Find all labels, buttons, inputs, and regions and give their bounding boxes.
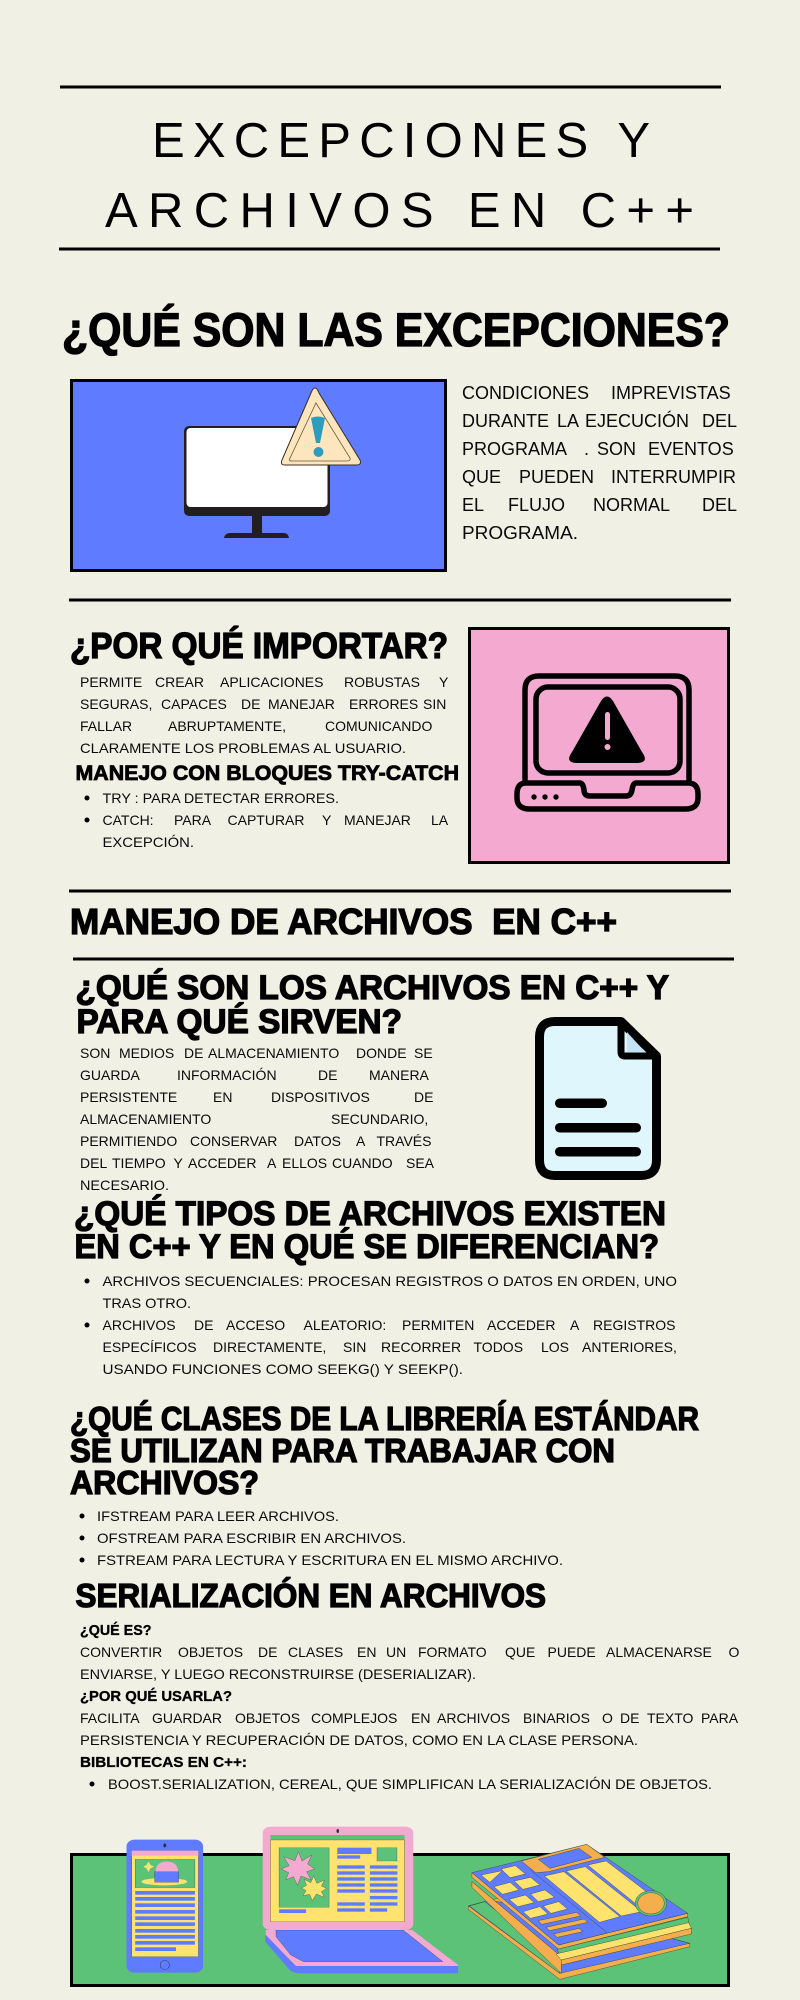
text: qué son los archivos: MEDIOS	[119, 1045, 174, 1061]
text: serialización: PUEDE	[548, 1644, 596, 1660]
text: qué son los archivos: DISPOSITIVOS	[271, 1089, 370, 1105]
text: qué son los archivos: DEL	[80, 1155, 107, 1171]
heading: tipos de archivos: ¿QUÉ TIPOS DE ARCHIVOS EXISTEN	[74, 1193, 666, 1233]
icon: laptop	[263, 1827, 458, 1973]
text: serialización: FACILITA	[80, 1710, 140, 1726]
text: qué son los archivos: DE	[184, 1045, 203, 1061]
text: serialización: FORMATO	[418, 1644, 487, 1660]
list: tipos de archivos: ACCEDER	[487, 1317, 555, 1333]
heading: qué son los archivos: PARA QUÉ SIRVEN?	[76, 1001, 402, 1041]
text: qué son los archivos: DE	[318, 1067, 337, 1083]
text: qué son los archivos: DATOS	[294, 1133, 341, 1149]
text: por qué importar: APLICACIONES	[220, 674, 323, 690]
text: qué son los archivos: INFORMACIÓN	[177, 1067, 277, 1083]
text: definición de excepciones: FLUJO	[508, 495, 565, 515]
icon: warning triangle	[281, 388, 360, 465]
text: serialización: ¿POR QUÉ USARLA?	[80, 1688, 232, 1705]
list: try catch: CAPTURAR	[228, 812, 305, 828]
text: serialización	[80, 1622, 740, 1792]
list: tipos de archivos: TODOS	[474, 1339, 523, 1355]
list: try catch	[84, 790, 449, 850]
text: serialización: ARCHIVOS	[437, 1710, 510, 1726]
text: definición de excepciones: PUEDEN	[519, 467, 594, 487]
list: try catch: TRY : PARA DETECTAR ERRORES.	[102, 790, 339, 806]
list: tipos de archivos: ESPECÍFICOS	[102, 1339, 197, 1355]
heading: clases de la librería: ¿QUÉ CLASES DE LA LIBRERÍA ESTÁNDAR	[70, 1400, 699, 1437]
list: tipos de archivos: ARCHIVOS SECUENCIALES: PROCESAN REGISTROS O DATOS EN ORDEN, UNO	[102, 1273, 677, 1289]
text: qué son los archivos: GUARDA	[80, 1067, 141, 1083]
icon: document	[540, 1022, 656, 1176]
text: qué son los archivos: SE	[414, 1045, 433, 1061]
list: try catch: MANEJAR	[344, 812, 411, 828]
text: qué son los archivos: DE	[414, 1089, 433, 1105]
text: qué son los archivos: PERMITIENDO	[80, 1133, 177, 1149]
icon: phone	[127, 1840, 203, 1973]
text: por qué importar: SEGURAS,	[80, 696, 152, 712]
icon: monitor	[184, 426, 330, 538]
text: definición de excepciones: INTERRUMPIR	[611, 467, 736, 487]
text: qué son los archivos: PERSISTENTE	[80, 1089, 177, 1105]
text: definición de excepciones: EL	[462, 495, 484, 515]
text: serialización: QUE	[505, 1644, 535, 1660]
text: serialización: ALMACENARSE	[606, 1644, 712, 1660]
list: clases: OFSTREAM PARA ESCRIBIR EN ARCHIVOS.	[97, 1530, 406, 1546]
list: clases	[80, 1508, 563, 1568]
text: qué son los archivos: DONDE	[356, 1045, 407, 1061]
text: definición de excepciones: LA	[557, 411, 579, 431]
text: serialización: OBJETOS	[235, 1710, 300, 1726]
text: definición de excepciones: EVENTOS	[648, 439, 734, 459]
text: serialización: ENVIARSE, Y LUEGO RECONSTRUIRSE (DESERIALIZAR).	[80, 1666, 476, 1682]
text: por qué importar: Y	[439, 674, 449, 690]
text: por qué importar: MANEJAR	[268, 696, 335, 712]
text: definición de excepciones: DEL	[702, 495, 737, 515]
list: tipos de archivos: SIN	[343, 1339, 366, 1355]
title: ARCHIVOS EN C++	[105, 184, 694, 238]
text: definición de excepciones: IMPREVISTAS	[611, 383, 731, 403]
text: por qué importar	[80, 674, 449, 756]
text: qué son los archivos: TIEMPO	[112, 1155, 166, 1171]
text: por qué importar: FALLAR	[80, 718, 132, 734]
title	[105, 114, 694, 238]
title: EXCEPCIONES Y	[152, 114, 650, 168]
list: tipos de archivos: TRAS OTRO.	[102, 1295, 191, 1311]
text: por qué importar: DE	[241, 696, 260, 712]
text: definición de excepciones	[462, 383, 737, 543]
list: clases: FSTREAM PARA LECTURA Y ESCRITURA EN EL MISMO ARCHIVO.	[97, 1552, 563, 1568]
text: qué son los archivos: CONSERVAR	[190, 1133, 277, 1149]
panel: laptop warning	[470, 628, 728, 862]
list: tipos de archivos: A	[570, 1317, 580, 1333]
text: qué son los archivos	[80, 1045, 435, 1193]
heading: qué son las excepciones: ¿QUÉ SON LAS EXCEPCIONES?	[62, 303, 730, 356]
text: serialización: O	[728, 1644, 740, 1660]
text: por qué importar: COMUNICANDO	[325, 718, 432, 734]
text: definición de excepciones: QUE	[462, 467, 501, 487]
list: tipos de archivos: DIRECTAMENTE,	[213, 1339, 326, 1355]
heading: clases de la librería	[70, 1400, 699, 1501]
text: qué son los archivos: EN	[213, 1089, 232, 1105]
list: tipos de archivos	[84, 1273, 677, 1377]
text: serialización: ¿QUÉ ES?	[80, 1622, 152, 1639]
panel: monitor illustration	[72, 380, 446, 570]
text: qué son los archivos: SEA	[406, 1155, 435, 1171]
text: serialización: GUARDAR	[152, 1710, 222, 1726]
text: qué son los archivos: ACCEDER	[188, 1155, 256, 1171]
text: qué son los archivos: CUANDO	[332, 1155, 393, 1171]
text: serialización: BOOST.SERIALIZATION, CEREAL, QUE SIMPLIFICAN LA SERIALIZACIÓN DE OBJETOS.	[108, 1776, 712, 1792]
text: qué son los archivos: SECUNDARIO,	[331, 1111, 428, 1127]
text: por qué importar: ROBUSTAS	[344, 674, 420, 690]
heading: qué son los archivos: ¿QUÉ SON LOS ARCHIVOS EN C++ Y	[76, 967, 669, 1007]
heading: tipos de archivos: EN C++ Y EN QUÉ SE DIFERENCIAN?	[74, 1226, 659, 1266]
list: try catch: CATCH:	[102, 812, 154, 828]
heading: serialización: SERIALIZACIÓN EN ARCHIVOS	[76, 1577, 546, 1614]
panel: devices illustration	[72, 1827, 728, 1986]
list: tipos de archivos: ALEATORIO:	[304, 1317, 386, 1333]
list: tipos de archivos: LOS	[541, 1339, 569, 1355]
text: serialización: DE	[620, 1710, 639, 1726]
text: serialización: OBJETOS	[178, 1644, 243, 1660]
text: por qué importar: SIN	[423, 696, 446, 712]
text: serialización: EN	[411, 1710, 430, 1726]
text: por qué importar: ERRORES	[349, 696, 418, 712]
list: try catch: LA	[431, 812, 449, 828]
text: qué son los archivos: ALMACENAMIENTO	[208, 1045, 339, 1061]
list: tipos de archivos: REGISTROS	[593, 1317, 675, 1333]
text: por qué importar: PERMITE	[80, 674, 142, 690]
list: tipos de archivos: ACCESO	[226, 1317, 285, 1333]
text: definición de excepciones: SON	[597, 439, 636, 459]
heading: manejo con bloques try-catch: MANEJO CON BLOQUES TRY-CATCH	[76, 762, 459, 785]
text: qué son los archivos: Y	[174, 1155, 184, 1171]
text: definición de excepciones: EJECUCIÓN	[585, 410, 689, 431]
heading: clases de la librería: SE UTILIZAN PARA TRABAJAR CON	[70, 1432, 615, 1469]
text: definición de excepciones: PROGRAMA	[462, 439, 567, 459]
text: definición de excepciones: NORMAL	[593, 495, 670, 515]
list: tipos de archivos: USANDO FUNCIONES COMO SEEKG() Y SEEKP().	[102, 1361, 463, 1377]
text: por qué importar: ABRUPTAMENTE,	[168, 718, 286, 734]
text: por qué importar: CREAR	[155, 674, 204, 690]
heading: tipos de archivos	[74, 1193, 666, 1266]
list: tipos de archivos: ANTERIORES,	[582, 1339, 677, 1355]
list: tipos de archivos: DE	[194, 1317, 213, 1333]
text: serialización: O	[602, 1710, 613, 1726]
list: try catch: Y	[322, 812, 332, 828]
text: serialización: CLASES	[288, 1644, 343, 1660]
list: tipos de archivos: ARCHIVOS	[102, 1317, 176, 1333]
icon: laptop with warning	[517, 676, 698, 809]
text: qué son los archivos: SON	[80, 1045, 110, 1061]
heading: manejo de archivos: MANEJO DE ARCHIVOS EN C++	[70, 901, 617, 942]
heading: clases de la librería: ARCHIVOS?	[70, 1464, 259, 1501]
text: qué son los archivos: ALMACENAMIENTO	[80, 1111, 211, 1127]
text: serialización: EN	[357, 1644, 376, 1660]
text: serialización: DE	[258, 1644, 277, 1660]
text: serialización: BIBLIOTECAS EN C++:	[80, 1755, 247, 1771]
text: definición de excepciones: PROGRAMA.	[462, 523, 578, 543]
list: clases: IFSTREAM PARA LEER ARCHIVOS.	[97, 1508, 339, 1524]
text: por qué importar: CAPACES	[161, 696, 227, 712]
text: serialización: PERSISTENCIA Y RECUPERACIÓN DE DATOS, COMO EN LA CLASE PERSONA.	[80, 1732, 638, 1748]
text: serialización: TEXTO	[647, 1710, 694, 1726]
text: qué son los archivos: MANERA	[369, 1067, 430, 1083]
icon: stack of papers	[468, 1844, 691, 1979]
text: definición de excepciones: DEL	[702, 411, 737, 431]
text: definición de excepciones: .	[584, 439, 589, 459]
text: qué son los archivos: NECESARIO.	[80, 1177, 169, 1193]
heading: por qué importar: ¿POR QUÉ IMPORTAR?	[70, 625, 448, 666]
text: definición de excepciones: DURANTE	[462, 411, 549, 431]
text: qué son los archivos: ELLOS	[282, 1155, 327, 1171]
heading: qué son los archivos	[76, 967, 669, 1041]
text: serialización: CONVERTIR	[80, 1644, 162, 1660]
list: try catch: PARA	[174, 812, 212, 828]
text: qué son los archivos: A	[356, 1133, 366, 1149]
text: serialización: UN	[386, 1644, 406, 1660]
list: tipos de archivos: RECORRER	[381, 1339, 461, 1355]
text: serialización: BINARIOS	[523, 1710, 590, 1726]
list: try catch: EXCEPCIÓN.	[102, 834, 194, 850]
list: tipos de archivos: PERMITEN	[402, 1317, 474, 1333]
text: serialización: PARA	[701, 1710, 739, 1726]
text: qué son los archivos: TRAVÉS	[376, 1133, 431, 1149]
text: por qué importar: CLARAMENTE LOS PROBLEMAS AL USUARIO.	[80, 740, 406, 756]
text: definición de excepciones: CONDICIONES	[462, 383, 589, 403]
text: qué son los archivos: A	[267, 1155, 277, 1171]
text: serialización: COMPLEJOS	[311, 1710, 397, 1726]
